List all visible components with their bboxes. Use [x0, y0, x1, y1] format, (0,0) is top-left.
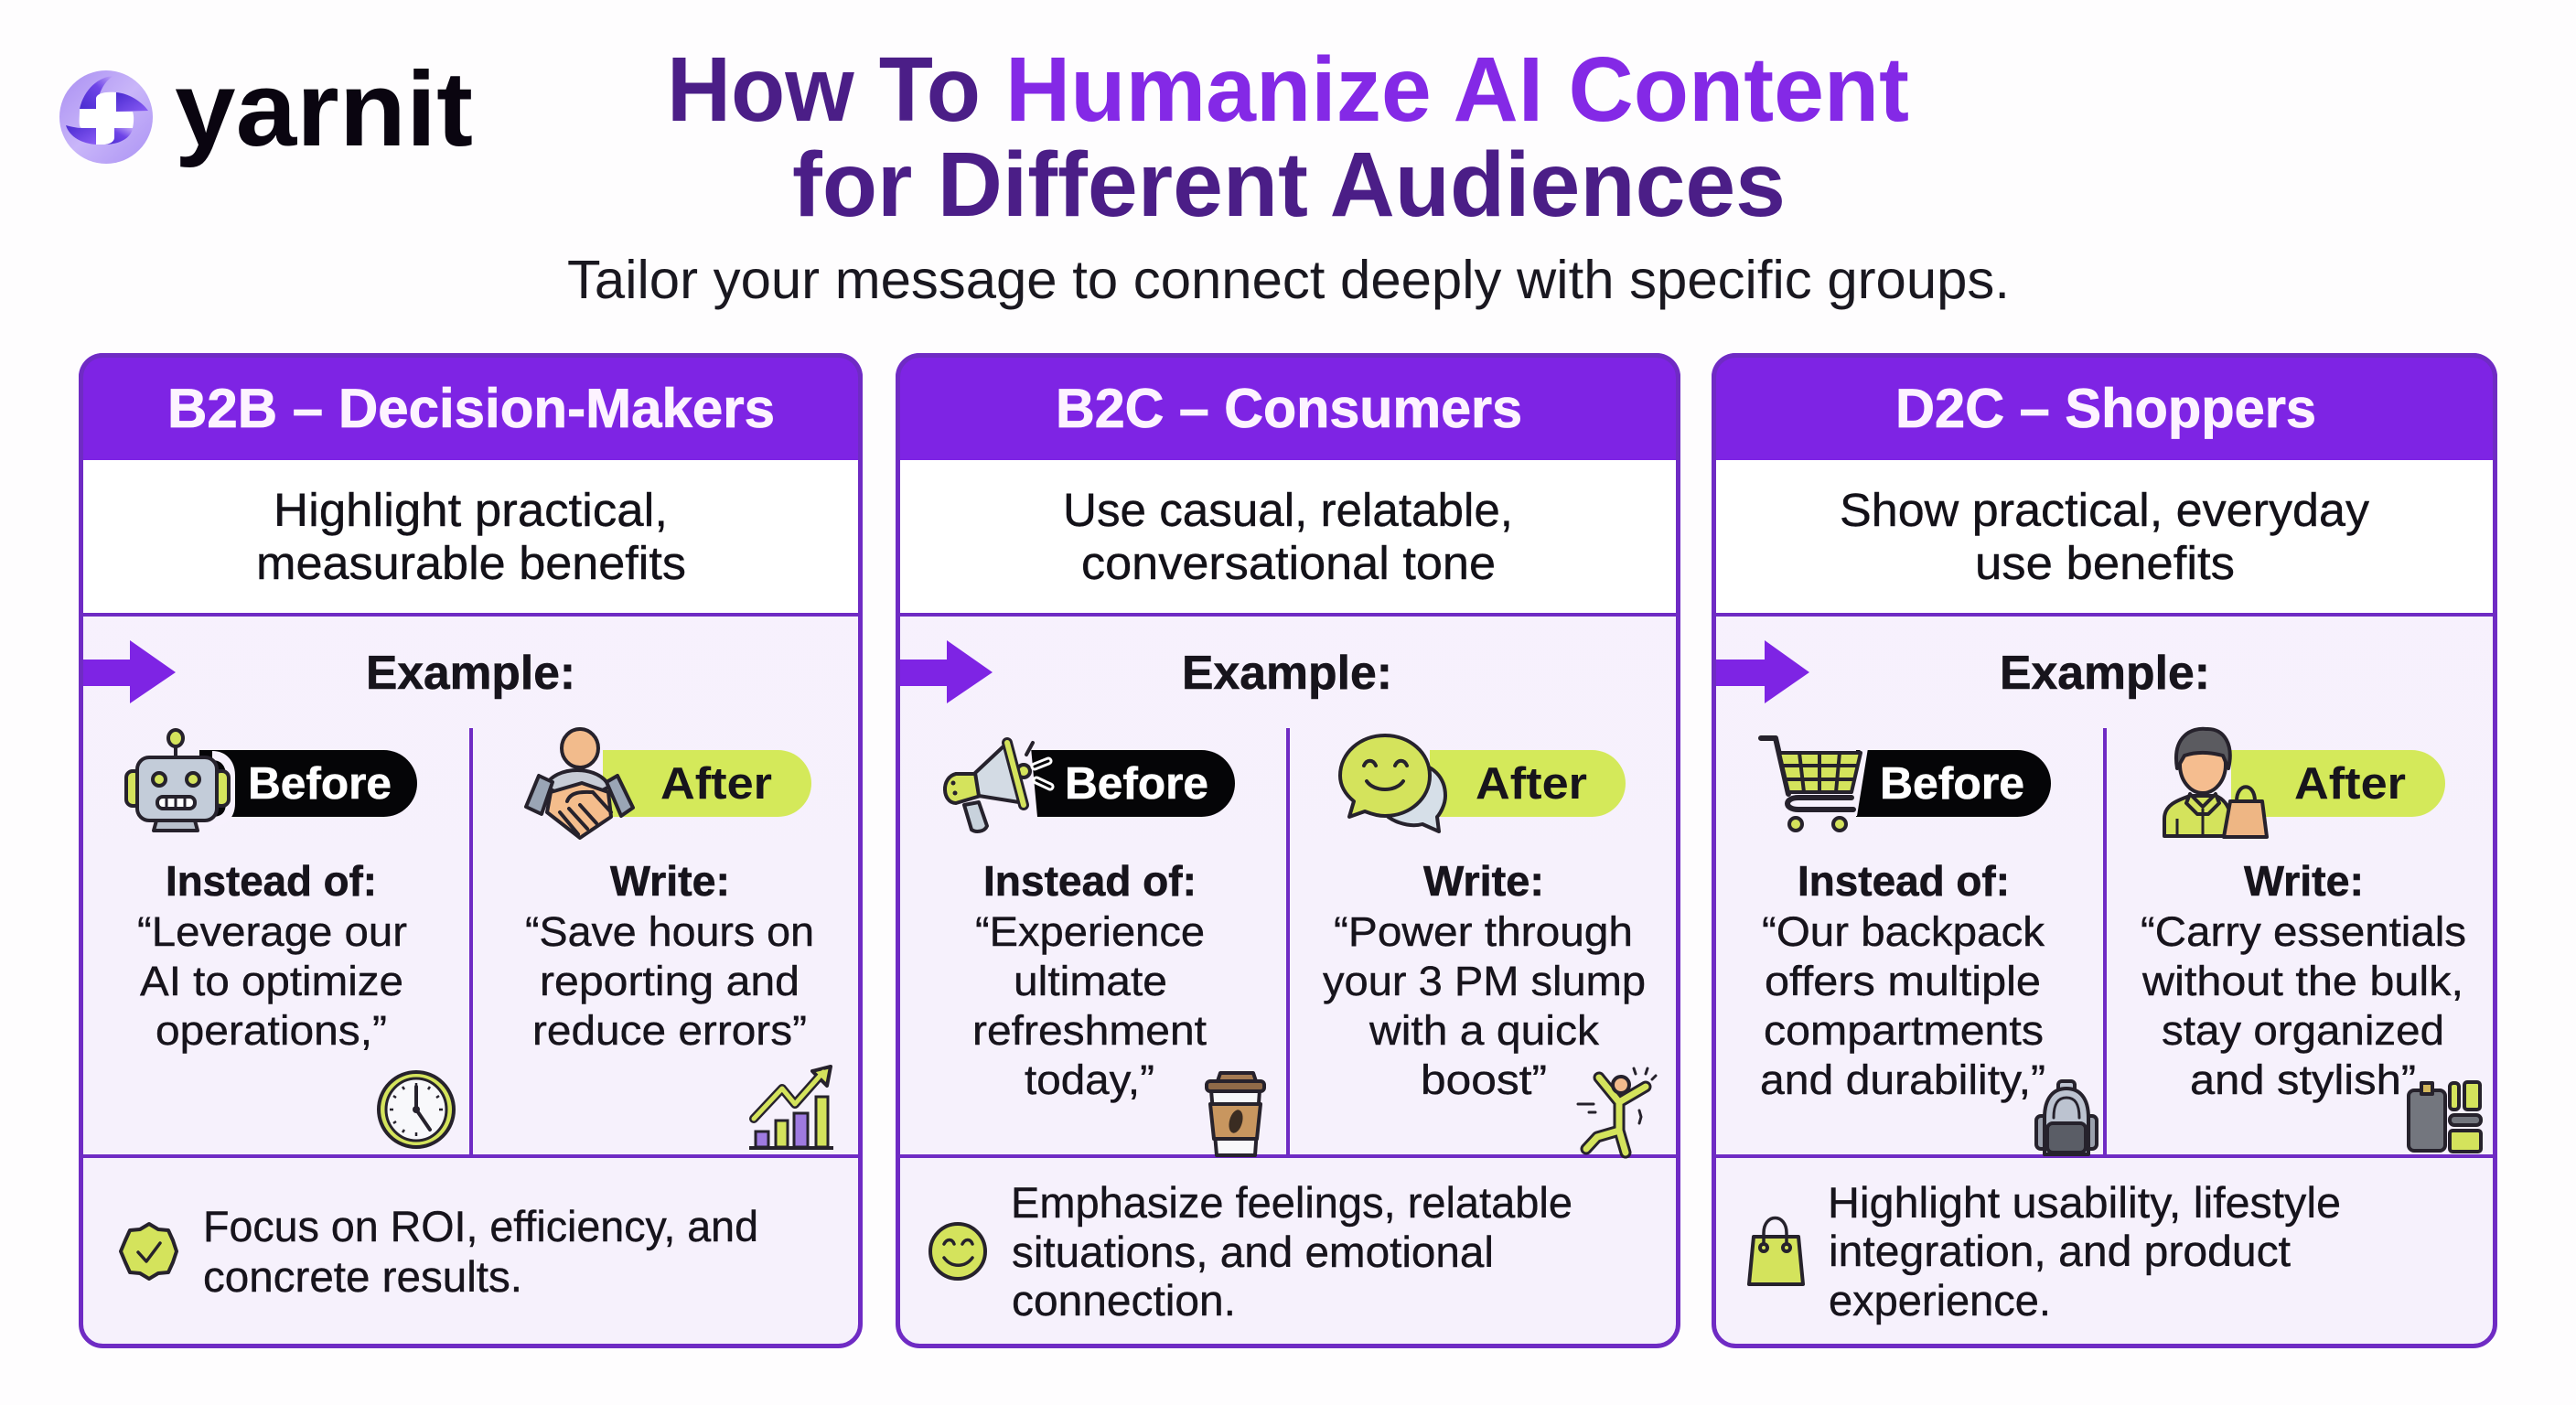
- icon: check badge: [121, 1224, 177, 1279]
- title: for Different Audiences: [792, 134, 1786, 236]
- after text: reduce errors”: [532, 1007, 807, 1054]
- after text: boost”: [1421, 1056, 1547, 1103]
- audience approach: [898, 460, 1678, 615]
- takeaway: [1749, 1178, 2341, 1325]
- icon: smiling speech bubbles: [1340, 735, 1445, 831]
- panel header: [1712, 353, 2497, 460]
- audience approach: measurable benefits: [256, 537, 686, 589]
- before text: AI to optimize: [140, 958, 403, 1004]
- after text: “Save hours on: [525, 908, 814, 955]
- takeaway: Highlight usability, lifestyle: [1828, 1178, 2341, 1227]
- after text: [2141, 857, 2466, 1103]
- after pill: [2231, 750, 2445, 817]
- icon: person and handshake: [526, 729, 633, 838]
- after text: stay organized: [2162, 1007, 2444, 1054]
- icon: smiley: [930, 1224, 985, 1279]
- after text: “Carry essentials: [2141, 908, 2466, 955]
- before text: [1760, 857, 2045, 1103]
- panel outline: [898, 355, 1678, 1346]
- icon: travel essentials: [2409, 1082, 2481, 1152]
- icon: clock: [379, 1072, 454, 1147]
- audience approach: conversational tone: [1081, 537, 1496, 589]
- section lines: [80, 615, 862, 1156]
- icon: backpack: [2036, 1081, 2097, 1154]
- before text: compartments: [1764, 1007, 2044, 1054]
- icon: shopping cart: [1761, 738, 1868, 831]
- wordmark: yarnit: [175, 49, 473, 168]
- example heading: Example:: [2000, 647, 2210, 700]
- panel header: [79, 353, 863, 460]
- before text: “Leverage our: [137, 908, 407, 955]
- takeaway: situations, and emotional: [1012, 1228, 1494, 1276]
- example heading: Example:: [1182, 647, 1392, 700]
- before text: Instead of:: [166, 857, 377, 905]
- before text: Instead of:: [1798, 857, 2010, 905]
- icon: energetic runner: [1578, 1068, 1656, 1153]
- before pill: Before: [248, 759, 392, 809]
- before text: today,”: [1025, 1056, 1154, 1103]
- takeaway: [121, 1202, 758, 1301]
- arrow: [1716, 640, 1809, 703]
- after pill: [603, 750, 811, 817]
- after text: with a quick: [1368, 1007, 1600, 1054]
- audience approach: Highlight practical,: [274, 484, 668, 536]
- after text: Write:: [1423, 857, 1544, 905]
- panel: B2B decision-makers: [79, 353, 863, 1346]
- audience approach: use benefits: [1975, 537, 2235, 589]
- panel: D2C shoppers: [1712, 353, 2497, 1346]
- before text: offers multiple: [1765, 958, 2041, 1004]
- audience approach: Use casual, relatable,: [1063, 484, 1513, 536]
- before pill: [1023, 750, 1235, 817]
- after text: reporting and: [540, 958, 800, 1004]
- panel header: D2C – Shoppers: [1895, 378, 2316, 439]
- after text: your 3 PM slump: [1323, 958, 1646, 1004]
- takeaway: integration, and product: [1829, 1227, 2291, 1275]
- before text: ultimate: [1014, 958, 1167, 1004]
- before text: [137, 857, 407, 1054]
- panel outline: [80, 355, 860, 1346]
- icon: shopper with bag: [2164, 729, 2267, 837]
- logo: yarnit: [59, 49, 473, 168]
- audience approach: Show practical, everyday: [1840, 484, 2369, 536]
- icon: yarnit mark: [59, 70, 153, 164]
- example heading: Example:: [366, 647, 575, 700]
- section lines: [896, 615, 1680, 1156]
- before text: and durability,”: [1760, 1056, 2045, 1103]
- icon: coffee cup: [1207, 1073, 1264, 1155]
- takeaway: Emphasize feelings, relatable: [1011, 1178, 1572, 1227]
- after text: and stylish”: [2190, 1056, 2416, 1103]
- after text: Write:: [2244, 857, 2364, 905]
- arrow: [898, 640, 993, 703]
- before text: [972, 857, 1208, 1103]
- after text: without the bulk,: [2141, 958, 2463, 1004]
- panel header: B2B – Decision-Makers: [167, 378, 775, 439]
- before text: Instead of:: [983, 857, 1197, 905]
- before text: “Our backpack: [1762, 908, 2045, 955]
- takeaway: Focus on ROI, efficiency, and: [203, 1202, 758, 1250]
- panel outline: [1714, 355, 2496, 1346]
- after pill: [1430, 750, 1626, 817]
- takeaway: [930, 1178, 1572, 1325]
- after pill: After: [2294, 759, 2406, 809]
- icon: shopping bag: [1749, 1218, 1803, 1284]
- icon: robot: [126, 730, 231, 831]
- before pill: Before: [1065, 759, 1208, 809]
- audience approach: [81, 460, 860, 615]
- after text: [1323, 857, 1646, 1103]
- after text: Write:: [610, 857, 730, 905]
- title: [667, 38, 1909, 236]
- before pill: [199, 750, 417, 817]
- after text: [525, 857, 814, 1054]
- before text: refreshment: [972, 1007, 1208, 1054]
- title: How To: [667, 38, 981, 141]
- title: Humanize AI Content: [1005, 38, 1909, 141]
- takeaway: concrete results.: [203, 1252, 522, 1301]
- icon: megaphone: [945, 737, 1050, 831]
- panel header: [896, 353, 1680, 460]
- icon: growth chart: [749, 1067, 833, 1148]
- after text: “Power through: [1334, 908, 1633, 955]
- section lines: [1712, 615, 2496, 1156]
- takeaway: connection.: [1012, 1276, 1236, 1325]
- before pill: Before: [1880, 759, 2024, 809]
- panel header: B2C – Consumers: [1056, 378, 1522, 439]
- before text: operations,”: [156, 1007, 387, 1054]
- before text: “Experience: [975, 908, 1205, 955]
- arrow: [82, 640, 176, 703]
- before pill: [1856, 750, 2051, 817]
- panel: B2C consumers: [896, 353, 1680, 1346]
- subtitle: Tailor your message to connect deeply with specific groups.: [567, 250, 2010, 310]
- after pill: After: [660, 759, 772, 809]
- audience approach: [1714, 460, 2495, 615]
- takeaway: experience.: [1829, 1276, 2051, 1325]
- after pill: After: [1476, 759, 1587, 809]
